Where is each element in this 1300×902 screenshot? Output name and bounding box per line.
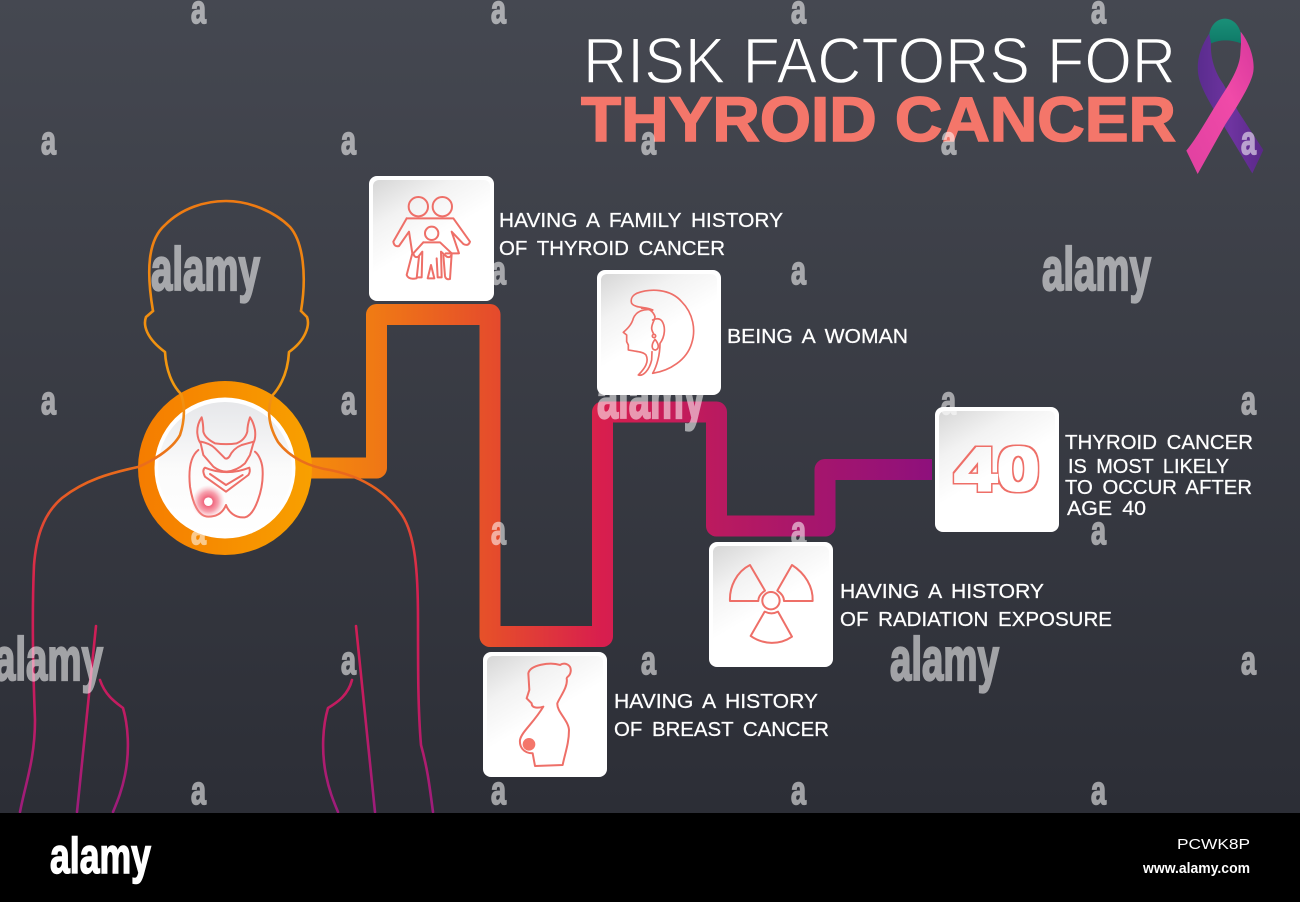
watermarks: a [1241, 639, 1257, 683]
watermarks: a [41, 119, 57, 163]
watermarks: a [641, 639, 657, 683]
title: RISK FACTORS FOR [583, 25, 1176, 97]
watermarks: a [341, 119, 357, 163]
label: breast cancer: HAVING A HISTORY [614, 690, 818, 713]
label: age 40: TO OCCUR AFTER [1065, 476, 1252, 499]
watermarks: a [191, 509, 207, 553]
footer image id: PCWK8P [1177, 836, 1250, 853]
icon: number 40: 40 [954, 436, 1040, 503]
watermarks: a [41, 379, 57, 423]
watermarks: a [791, 769, 807, 813]
label: radiation exposure: OF RADIATION EXPOSURE [840, 608, 1112, 631]
watermarks: a [641, 119, 657, 163]
label: age 40: THYROID CANCER [1065, 431, 1253, 454]
icon: thyroid gland [189, 417, 263, 518]
icon: woman with breast tumour [520, 664, 571, 766]
footer url: www.alamy.com [1142, 860, 1250, 877]
card: radiation exposure [709, 542, 833, 667]
watermarks: alamy [151, 236, 260, 303]
person outline [20, 201, 433, 812]
title [581, 25, 1176, 155]
title: THYROID CANCER [581, 85, 1176, 155]
watermarks: a [491, 249, 507, 293]
label: age 40: IS MOST LIKELY [1068, 455, 1229, 478]
icon: woman profile [623, 290, 694, 375]
label: breast cancer: OF BREAST CANCER [614, 718, 829, 741]
watermarks: a [941, 379, 957, 423]
watermarks: a [791, 509, 807, 553]
watermarks: a [791, 249, 807, 293]
label: family history: HAVING A FAMILY HISTORY [499, 209, 783, 232]
label: age 40: AGE 40 [1067, 497, 1146, 520]
icon: awareness ribbon [1186, 19, 1263, 174]
thyroid circle badge [138, 381, 312, 555]
label: age 40 [1065, 431, 1253, 520]
label: being a woman: BEING A WOMAN [727, 325, 908, 348]
watermarks: a [341, 639, 357, 683]
footer bar [0, 813, 1300, 902]
footer logo: alamy [50, 828, 151, 884]
watermarks: a [941, 119, 957, 163]
watermarks: a [1241, 379, 1257, 423]
label: radiation exposure: HAVING A HISTORY [840, 580, 1044, 603]
watermarks: alamy [890, 626, 999, 693]
watermarks: a [1091, 509, 1107, 553]
watermarks: alamy [1042, 236, 1151, 303]
watermarks: a [491, 509, 507, 553]
icon: radiation symbol [730, 565, 813, 643]
label: family history: OF THYROID CANCER [499, 237, 725, 260]
watermarks: a [191, 769, 207, 813]
watermarks: a [341, 379, 357, 423]
watermarks: a [1091, 769, 1107, 813]
connector path [305, 314, 932, 636]
icon: family [393, 197, 470, 279]
label: family history [499, 209, 783, 260]
label: breast cancer [614, 690, 829, 741]
card: being a woman [597, 270, 721, 395]
label: radiation exposure [840, 580, 1112, 631]
card: breast cancer [483, 652, 607, 777]
watermarks: a [1241, 119, 1257, 163]
card: family history [369, 176, 494, 301]
watermarks: alamy [597, 364, 705, 431]
card: age 40 [935, 407, 1059, 532]
watermarks: a [491, 769, 507, 813]
